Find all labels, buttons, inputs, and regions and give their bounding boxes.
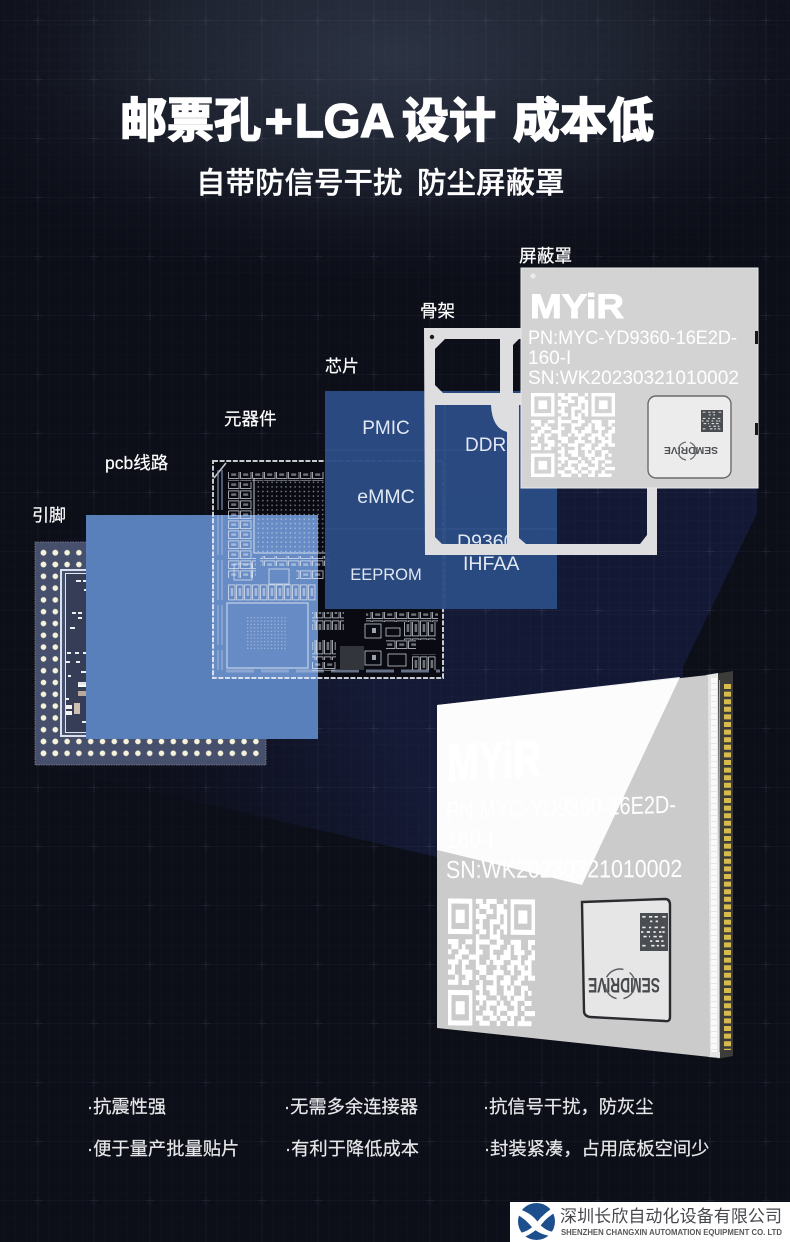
layer: components bbox=[213, 461, 443, 678]
layer: pins bbox=[35, 542, 266, 765]
serial number: SN:WK20230321010002 bbox=[528, 368, 739, 389]
layer: component board base bbox=[212, 460, 444, 678]
layer: shield bbox=[521, 268, 758, 488]
layer: pcb traces bbox=[86, 515, 318, 739]
module part suffix: 160-I bbox=[446, 824, 494, 853]
feature: mass production: ·便于量产批量贴片 bbox=[87, 1138, 239, 1159]
feature: lower cost: ·有利于降低成本 bbox=[285, 1138, 419, 1159]
module part number: PN:MYC-YD9360-16E2D- bbox=[446, 790, 676, 824]
feature: shock resistance: ·抗震性强 bbox=[87, 1096, 166, 1117]
module body bbox=[437, 675, 710, 1057]
label: chips: 芯片 bbox=[325, 357, 359, 376]
chip label: PMIC: PMIC bbox=[362, 418, 410, 439]
company name: 深圳长欣自动化设备有限公司 bbox=[560, 1207, 782, 1226]
module serial number: SN:WK20230321010002 bbox=[446, 854, 682, 883]
module QR code bbox=[448, 898, 535, 1026]
title: + bbox=[265, 94, 292, 147]
assembled module bbox=[437, 671, 733, 1059]
feature: anti-interference: ·抗信号干扰，防灰尘 bbox=[483, 1096, 654, 1117]
label: components: 元器件 bbox=[224, 409, 276, 429]
label: frame: 骨架 bbox=[420, 301, 455, 321]
module SoC package: SEMDRIVE bbox=[588, 973, 660, 997]
feature list bbox=[87, 1096, 709, 1159]
logo mark bbox=[518, 1203, 556, 1240]
SoC package: SEMDRIVE bbox=[664, 444, 718, 456]
feature: compact package: ·封装紧凑，占用底板空间少 bbox=[484, 1138, 709, 1159]
layer: chips bbox=[325, 391, 557, 609]
pin strip bbox=[706, 671, 733, 1059]
title: 成本低 bbox=[513, 94, 654, 147]
title: LGA bbox=[295, 94, 394, 147]
module logo: MYiR bbox=[447, 730, 541, 793]
chip label: EEPROM: EEPROM bbox=[350, 566, 422, 584]
label: shield: 屏蔽罩 bbox=[519, 246, 572, 266]
QR code bbox=[531, 393, 615, 477]
subtitle: 防尘屏蔽罩 bbox=[417, 167, 565, 200]
chip label: IHFAA: IHFAA bbox=[463, 553, 519, 575]
chip label: D9360: D9360 bbox=[457, 531, 515, 553]
module glare bbox=[437, 677, 680, 885]
part number: PN:MYC-YD9360-16E2D- bbox=[528, 328, 737, 349]
subtitle: 自带防信号干扰 bbox=[196, 167, 403, 200]
layer: frame bbox=[424, 328, 657, 555]
SoC package bbox=[648, 396, 731, 478]
feature: no extra connectors: ·无需多余连接器 bbox=[284, 1096, 418, 1117]
label: pcb traces: pcb线路 bbox=[105, 453, 169, 473]
title: 设计 bbox=[402, 94, 496, 147]
module SoC package bbox=[582, 899, 670, 1021]
title: 邮票孔 bbox=[120, 94, 261, 147]
chip label: eMMC: eMMC bbox=[357, 486, 415, 508]
logo: MYiR bbox=[530, 288, 624, 326]
part number suffix: 160-I bbox=[528, 348, 571, 369]
company logo bbox=[510, 1202, 790, 1242]
label: pins: 引脚 bbox=[32, 506, 66, 525]
chip label: DDR: DDR bbox=[465, 435, 506, 456]
pcb overlap tint bbox=[212, 515, 318, 678]
